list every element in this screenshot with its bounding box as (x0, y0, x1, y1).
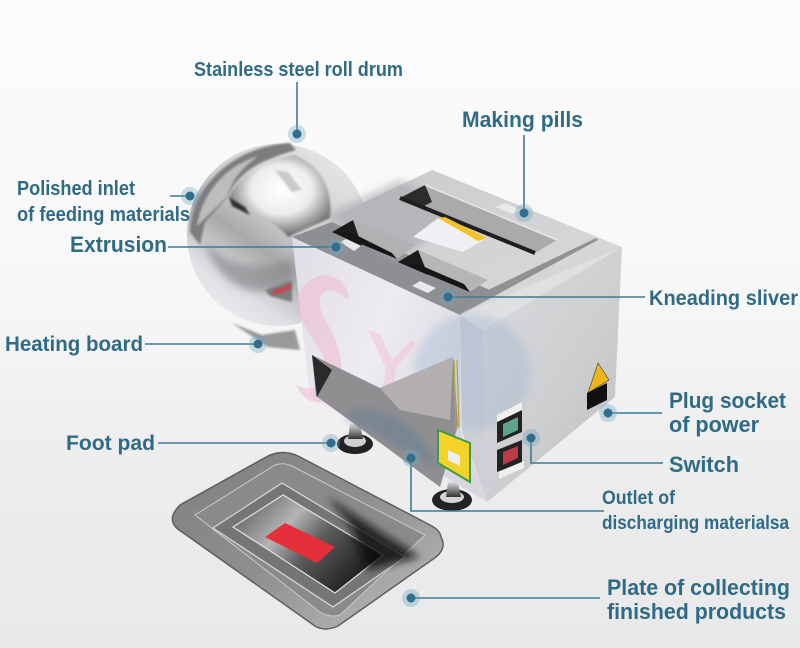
heating switch: green (497, 402, 522, 443)
discharge opening (312, 355, 458, 487)
label: Plug socket of power: of power (669, 412, 759, 437)
power switch: red (497, 440, 524, 479)
watermark (296, 275, 530, 430)
short slot left (332, 220, 415, 259)
label: Polished inlet of feeding materials (17, 178, 190, 226)
label: Switch: Switch (669, 452, 739, 477)
power socket (587, 383, 607, 410)
warning triangle (588, 363, 609, 393)
machine body (292, 170, 622, 511)
pointer lines (145, 82, 663, 598)
steel roll drum (187, 143, 369, 326)
label: Plate of collecting finished products: finished products (607, 599, 786, 624)
machine foot: right (432, 482, 472, 511)
label: Extrusion: Extrusion (70, 232, 167, 257)
short slot right (398, 250, 488, 292)
label: Making pills: Making pills (462, 107, 583, 132)
label: Plug socket of power: Plug socket (669, 388, 787, 413)
label: Outlet of discharging materialsa (602, 488, 789, 534)
label: Stainless steel roll drum: Stainless steel roll drum (194, 59, 403, 81)
label: Heating board: Heating board (5, 333, 143, 356)
certification tag (438, 360, 470, 482)
long slot with comb (400, 185, 557, 253)
tray red sticker (265, 523, 335, 563)
label: Plug socket of power (669, 388, 787, 437)
right panel (460, 247, 622, 502)
front panel (292, 237, 487, 502)
label: Foot pad: Foot pad (66, 432, 155, 455)
instruction sticker (413, 217, 487, 252)
label: Polished inlet of feeding materials: of feeding materials (17, 204, 190, 226)
collecting tray (172, 452, 443, 629)
heating board (232, 323, 300, 350)
label: Plate of collecting finished products: Plate of collecting (607, 575, 790, 600)
pointer dots (181, 125, 617, 607)
label: Plate of collecting finished products (607, 575, 790, 624)
small top labels (340, 203, 521, 293)
label: Polished inlet of feeding materials: Polished inlet (17, 178, 135, 200)
top panel (292, 170, 622, 315)
machine foot: left (337, 424, 373, 454)
label: Outlet of discharging materialsa: Outlet of (602, 488, 676, 509)
